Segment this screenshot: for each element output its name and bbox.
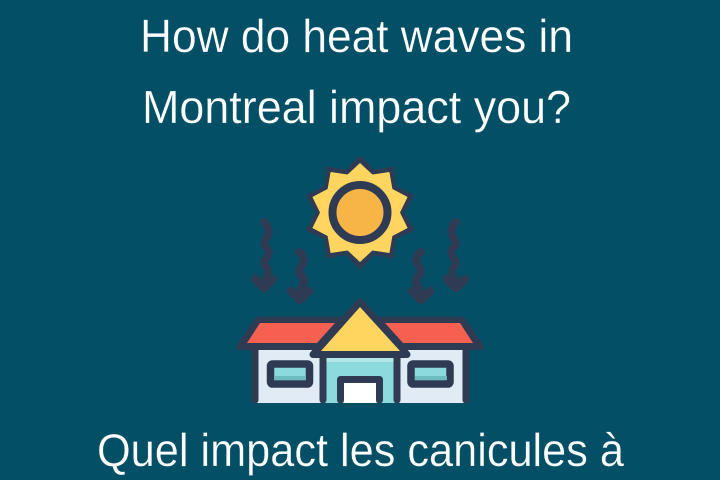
title: French: Quel impact les canicules à [97,424,624,476]
central entrance [325,354,395,403]
title: English: Montreal impact you? [142,81,571,133]
wall posts [255,348,466,400]
title: English: How do heat waves in [140,10,573,62]
door [340,380,380,403]
arrow: heat ray inner left [291,252,309,300]
right window [411,364,450,384]
right roof [375,320,480,346]
right wall [398,348,465,403]
title: English [140,10,573,133]
arrow: heat ray inner right [412,252,430,300]
left wall [256,348,322,403]
left window [270,364,310,384]
central gable [313,302,407,354]
icon: house [240,302,480,403]
icon: sun [308,158,412,268]
arrow: heat ray far left [256,222,273,288]
left roof [240,320,345,346]
arrow: heat ray far right [447,222,465,288]
